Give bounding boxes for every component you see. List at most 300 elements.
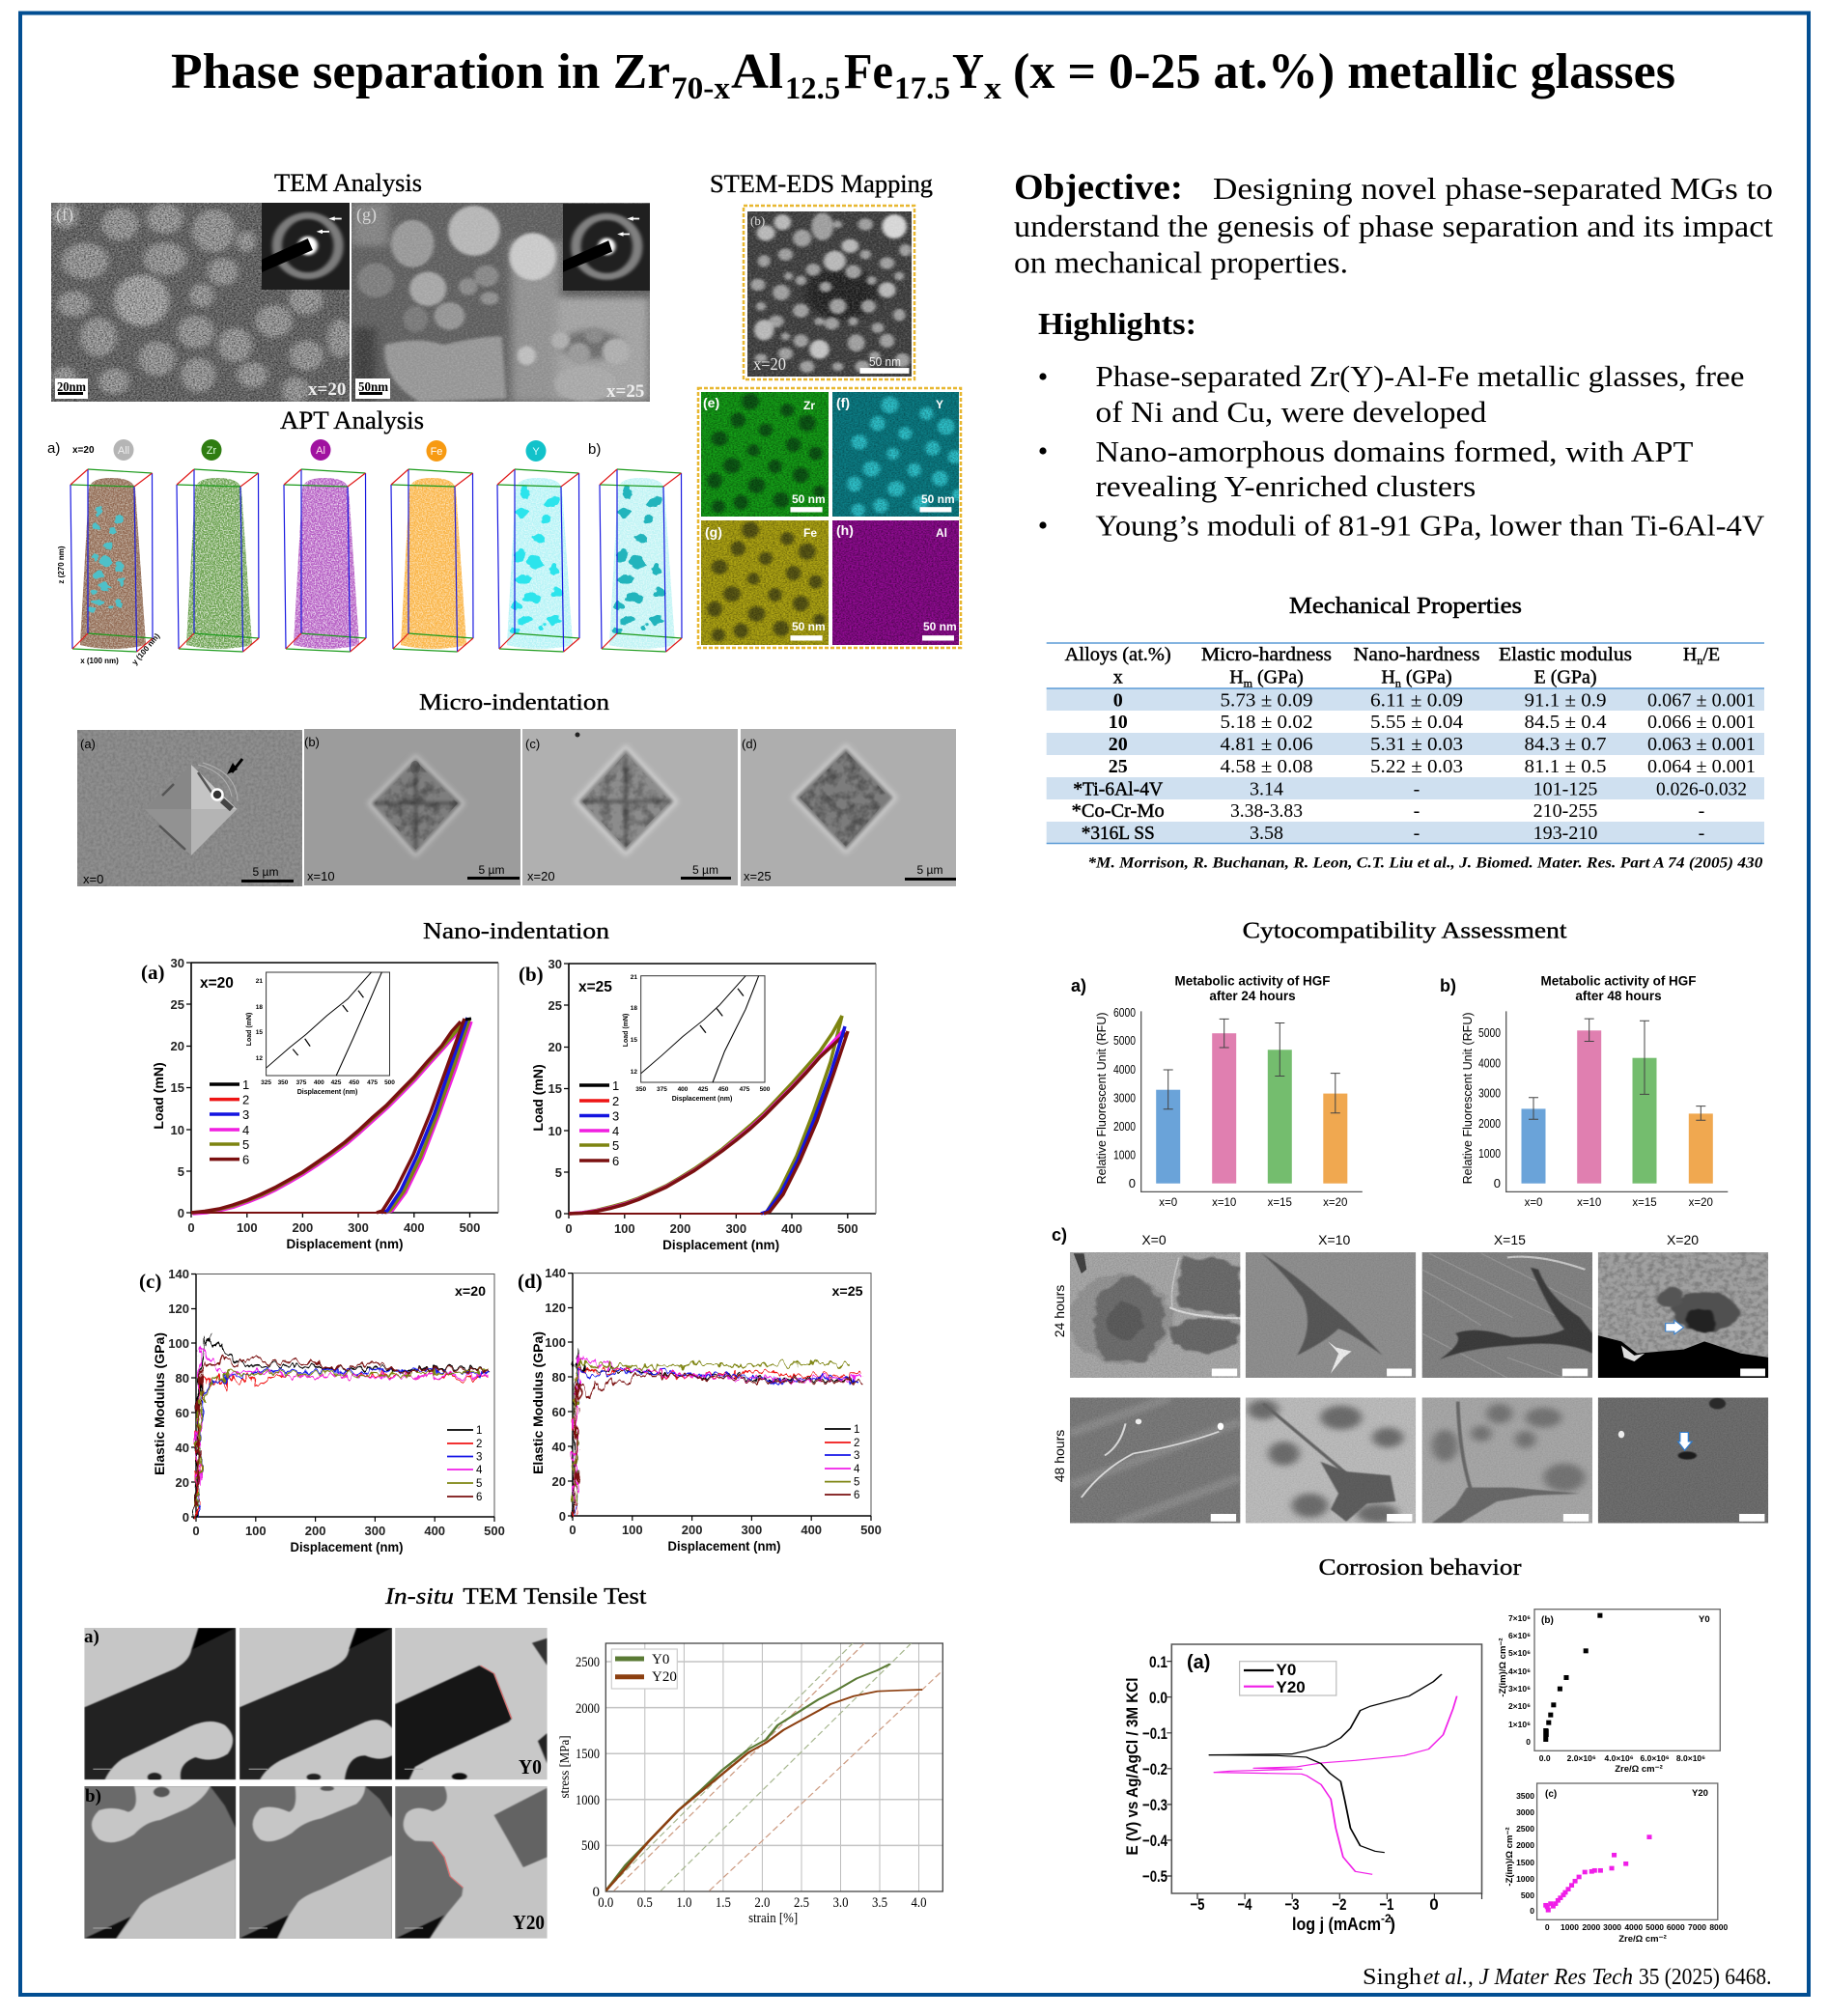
mechanical properties table: 84.3 ± 0.7 [1524, 734, 1607, 755]
mechanical properties table: 101-125 [1533, 778, 1597, 799]
mechanical properties table: H [1381, 667, 1395, 688]
STEM labels: 50 nm [869, 354, 901, 369]
mechanical properties table: 210-255 [1533, 800, 1597, 822]
inset b: 350 [635, 1086, 647, 1093]
chart d: elastic modulus x=25: Elastic Modulus (GPa) [530, 1331, 546, 1474]
chart c: elastic modulus x=20: 60 [176, 1406, 189, 1420]
bar chart b: 48 hours: x=10 [1577, 1197, 1601, 1209]
SEM grid labels: X=20 [1667, 1232, 1699, 1247]
mechanical properties table: 193-210 [1533, 823, 1597, 844]
Nyquist chart c: Y20: 2000 [1516, 1840, 1534, 1850]
inset b: 425 [698, 1086, 709, 1093]
STEM image x=20 [747, 211, 912, 377]
bar chart b: 48 hours: 4000 [1478, 1056, 1501, 1070]
Nyquist chart c: Y20: 1000 [1561, 1922, 1579, 1932]
APT reconstructions panel: b) [588, 441, 601, 458]
chart b: load-displacement x=25: 20 [548, 1040, 562, 1054]
SEM grid labels: X=15 [1494, 1232, 1526, 1247]
EDS labels: (h) [836, 522, 854, 538]
specimen: Al [284, 469, 366, 652]
Nyquist chart c: Y20: 2500 [1516, 1824, 1534, 1834]
title: 70-x [671, 71, 730, 106]
citation [1363, 1965, 1771, 1990]
chart a: load-displacement x=20: 0 [187, 1220, 195, 1235]
specimen: Zr [177, 469, 259, 652]
polarization chart a: ) [1390, 1915, 1395, 1934]
EDS labels: 50 nm [792, 620, 826, 633]
bar chart a: 24 hours: a) [1071, 976, 1086, 995]
chart c: elastic modulus x=20 [139, 1267, 505, 1554]
chart d: elastic modulus x=25: 140 [545, 1266, 566, 1280]
polarization chart a: log j (mAcm [1292, 1915, 1381, 1934]
bar chart b: 48 hours: b) [1440, 976, 1456, 995]
chart c: elastic modulus x=20: 300 [365, 1524, 385, 1538]
Nyquist chart c: Y20: 3000 [1516, 1807, 1534, 1817]
chart b: load-displacement x=25: 500 [837, 1221, 858, 1236]
APT element badges: Y [532, 446, 540, 458]
chart: stress-strain [558, 1643, 942, 1926]
SEM grid labels: 24 hours [1052, 1285, 1067, 1337]
heading: Nano-indentation: Nano-indentation [423, 919, 609, 944]
bar chart a: 24 hours: Relative Fluorescent Unit (RFU) [1094, 1012, 1109, 1184]
EDS labels: 50 nm [923, 620, 957, 633]
heading: STEM-EDS Mapping: STEM-EDS Mapping [710, 170, 933, 198]
mechanical properties table: m [1244, 677, 1253, 690]
title: Phase separation in Zr [171, 44, 670, 99]
chart d: elastic modulus x=25: 500 [860, 1523, 882, 1537]
Nyquist chart b: Y0: 5×10⁶ [1508, 1648, 1531, 1658]
TEM labels and scale bars: (f) [56, 205, 73, 225]
Nyquist chart b: Y0: 4.0×10⁶ [1605, 1753, 1634, 1763]
polarization chart a: 0.1 [1149, 1653, 1167, 1671]
legend c: 6 [476, 1492, 482, 1503]
legend c: 3 [476, 1452, 482, 1464]
title: (x = 0-25 at.%) metallic glasses [1013, 44, 1675, 99]
legend c [447, 1425, 483, 1503]
bar chart a: 24 hours: x=10 [1212, 1197, 1236, 1209]
mechanical properties table: Alloys (at.%) [1065, 644, 1171, 665]
bar chart b: 48 hours [1440, 973, 1728, 1209]
mechanical properties table: (GPa) [1401, 667, 1452, 688]
SEM 48h x=10 [1246, 1398, 1416, 1524]
chart c: elastic modulus x=20: 40 [176, 1441, 189, 1455]
polarization chart a: −2 [1333, 1895, 1346, 1914]
polarization chart a: -2 [1381, 1912, 1392, 1925]
micro-indent image x=20: x=20 [527, 869, 555, 883]
title: Y [952, 44, 984, 99]
inset a: 350 [278, 1079, 289, 1086]
Nyquist chart b: Y0 [1498, 1610, 1720, 1775]
inset b: Load (mN) [623, 1014, 630, 1047]
heading: Micro-indentation: Micro-indentation [419, 690, 609, 715]
mechanical properties table: /E [1702, 644, 1720, 665]
bar chart a: 24 hours: 2000 [1113, 1119, 1136, 1134]
chart a: load-displacement x=20: Load (mN) [151, 1062, 166, 1130]
legend c: 5 [476, 1478, 482, 1490]
APT reconstructions panel: x (100 nm) [80, 657, 119, 665]
citation: Singh [1363, 1965, 1421, 1990]
bar chart b: 48 hours: 0 [1494, 1176, 1501, 1190]
APT element badges [114, 439, 547, 462]
polarization chart a: −0.5 [1142, 1867, 1167, 1886]
polarization chart a: −1 [1379, 1895, 1394, 1914]
legend: Y20 [652, 1669, 677, 1685]
heading: In-situ TEM Tensile Test: TEM Tensile Test [463, 1584, 647, 1610]
inset b: 400 [678, 1086, 689, 1093]
mechanical properties table: 3.14 [1250, 778, 1283, 799]
mechanical properties table: 0.064 ± 0.001 [1647, 756, 1756, 777]
chart: stress-strain: 0 [593, 1885, 600, 1900]
legend [1240, 1661, 1336, 1696]
chart c: elastic modulus x=20: 20 [176, 1475, 189, 1490]
table footnote: *M. Morrison, R. Buchanan, R. Leon, C.T. Liu et al., J. Biomed. Mater. Res. Part A 74 (2005) 430 [1087, 855, 1762, 871]
mechanical properties table: 91.1 ± 0.9 [1524, 690, 1607, 712]
chart d: elastic modulus x=25: 40 [552, 1440, 566, 1454]
Nyquist chart b: Y0: Y0 [1699, 1614, 1710, 1625]
title [171, 44, 1675, 106]
Nyquist chart c: Y20: -Z(im)/Ω cm⁻² [1505, 1827, 1515, 1887]
chart: stress-strain: 1.0 [676, 1895, 691, 1911]
title: Al [731, 44, 783, 99]
mechanical properties table: 3.38-3.83 [1230, 800, 1303, 822]
micro-indent image x=25 [741, 729, 956, 886]
SEM grid labels: X=0 [1141, 1232, 1167, 1247]
chart d: elastic modulus x=25: 0 [569, 1523, 577, 1537]
chart c: elastic modulus x=20: 200 [305, 1524, 325, 1538]
chart: stress-strain: 500 [581, 1838, 600, 1854]
legend b: 5 [612, 1138, 619, 1153]
mechanical properties table: - [1414, 823, 1420, 844]
mechanical properties table: Micro-hardness [1201, 644, 1332, 665]
bar chart b: 48 hours: 3000 [1478, 1085, 1501, 1101]
chart: stress-strain: 1500 [576, 1747, 600, 1762]
chart a: load-displacement x=20: 0 [178, 1206, 184, 1220]
chart a: load-displacement x=20: 15 [171, 1080, 184, 1095]
Nyquist chart b: Y0: Zre/Ω cm⁻² [1615, 1764, 1663, 1775]
inset a: 21 [256, 978, 263, 985]
Nyquist chart c: Y20: (c) [1545, 1789, 1557, 1800]
legend a: 4 [242, 1123, 249, 1137]
legend d: 6 [854, 1490, 859, 1501]
chart a: load-displacement x=20 [141, 956, 498, 1251]
EDS map Y [832, 392, 959, 517]
chart c: elastic modulus x=20: 120 [168, 1302, 189, 1316]
bar chart a: 24 hours: Metabolic activity of HGF [1174, 973, 1331, 989]
chart b: load-displacement x=25: 0 [555, 1207, 562, 1221]
chart a: load-displacement x=20: 100 [237, 1220, 258, 1235]
inset b: 450 [718, 1086, 729, 1093]
APT element badges: All [118, 445, 129, 457]
bar chart b: 48 hours: x=0 [1525, 1197, 1542, 1209]
objective text: on mechanical properties. [1014, 245, 1348, 280]
legend: Y0 [652, 1652, 669, 1667]
tensile image labels: a) [84, 1627, 99, 1647]
heading: Cytocompatibility Assessment: Cytocompatibility Assessment [1243, 919, 1567, 944]
chart a: load-displacement x=20: 25 [171, 997, 184, 1012]
SEM grid labels [1052, 1225, 1699, 1482]
Nyquist chart c: Y20: 0 [1530, 1906, 1534, 1916]
heading: In-situ TEM Tensile Test [384, 1584, 647, 1610]
polarization chart a: −4 [1238, 1895, 1252, 1914]
polarization chart a: −5 [1190, 1895, 1205, 1914]
chart d: elastic modulus x=25: 200 [682, 1523, 702, 1537]
Nyquist chart b: Y0: 8.0×10⁶ [1676, 1753, 1705, 1763]
mechanical properties table: H [1229, 667, 1244, 688]
micro-indent image x=20: (c) [525, 737, 540, 751]
mechanical properties table: Nano-hardness [1354, 644, 1480, 665]
highlights list: revealing Y-enriched clusters [1095, 469, 1476, 503]
chart a: load-displacement x=20: Displacement (nm) [286, 1236, 404, 1251]
EDS labels: 50 nm [792, 492, 826, 506]
mechanical properties table: 5.55 ± 0.04 [1370, 712, 1463, 733]
chart d: elastic modulus x=25: 120 [545, 1301, 566, 1315]
bar chart b: 48 hours: 1000 [1478, 1146, 1501, 1161]
bar chart a: 24 hours [1071, 973, 1363, 1209]
chart d: elastic modulus x=25: 20 [552, 1474, 566, 1489]
inset a: 375 [296, 1079, 307, 1086]
chart a: load-displacement x=20: (a) [141, 961, 164, 984]
inset a: 400 [314, 1079, 324, 1086]
bar chart b: 48 hours: Relative Fluorescent Unit (RFU) [1460, 1012, 1475, 1184]
chart a: load-displacement x=20: 200 [293, 1220, 313, 1235]
mechanical properties table: (GPa) [1252, 667, 1304, 688]
legend c: 2 [476, 1439, 482, 1450]
bar chart a: 24 hours: 3000 [1113, 1091, 1136, 1105]
chart: stress-strain: 3.0 [832, 1895, 848, 1911]
EDS labels: Fe [803, 526, 817, 540]
chart c: elastic modulus x=20: (c) [139, 1270, 161, 1293]
Nyquist chart b: Y0: 3×10⁶ [1508, 1684, 1531, 1694]
mechanical properties table: 0 [1113, 690, 1123, 712]
bar chart a: 24 hours: after 24 hours [1209, 989, 1296, 1003]
Nyquist chart c: Y20: Y20 [1692, 1788, 1708, 1799]
chart b: load-displacement x=25: 25 [548, 998, 562, 1013]
chart b: load-displacement x=25: 400 [781, 1221, 802, 1236]
title: Fe [844, 44, 893, 99]
chart d: elastic modulus x=25: Displacement (nm) [668, 1538, 780, 1554]
chart b: load-displacement x=25: x=25 [578, 979, 612, 995]
Nyquist chart c: Y20: 8000 [1709, 1922, 1729, 1932]
Nyquist chart c: Y20: 4000 [1624, 1922, 1644, 1932]
mechanical properties table: 3.58 [1250, 823, 1283, 844]
chart d: elastic modulus x=25: 300 [742, 1523, 762, 1537]
chart c: elastic modulus x=20: 140 [168, 1267, 189, 1281]
SEM grid labels: X=10 [1318, 1232, 1350, 1247]
EDS labels: Al [936, 526, 947, 540]
SEM grid labels: c) [1052, 1225, 1067, 1245]
APT reconstructions panel: a) [47, 440, 60, 457]
chart c: elastic modulus x=20: 100 [168, 1336, 189, 1351]
legend c: 4 [476, 1465, 483, 1476]
legend d: 2 [854, 1438, 859, 1449]
micro-indent image x=0: 5 µm [253, 865, 278, 879]
chart b: load-displacement x=25: 0 [565, 1221, 573, 1236]
mechanical properties table: 0.026-0.032 [1656, 778, 1747, 799]
EDS labels: (f) [836, 395, 850, 410]
inset a: 450 [349, 1079, 360, 1086]
Nyquist chart c: Y20: 3000 [1603, 1922, 1621, 1932]
bar chart a: 24 hours: 1000 [1113, 1147, 1136, 1162]
objective text: understand the genesis of phase separation and its impact [1014, 209, 1773, 243]
chart c: elastic modulus x=20: 500 [484, 1524, 505, 1538]
inset b: 15 [631, 1037, 637, 1044]
Nyquist chart c: Y20: 1500 [1516, 1858, 1534, 1867]
bar chart a: 24 hours: x=0 [1159, 1197, 1177, 1209]
mechanical properties table: 6.11 ± 0.09 [1370, 690, 1463, 712]
chart: stress-strain: 2.0 [754, 1895, 770, 1911]
citation: 35 (2025) 6468. [1639, 1965, 1771, 1990]
heading: APT Analysis: APT Analysis [280, 406, 424, 434]
polarization chart a [1123, 1644, 1481, 1934]
citation: et al., J Mater Res Tech [1423, 1965, 1633, 1990]
SEM 48h x=20 [1597, 1398, 1769, 1524]
chart: stress-strain: 1000 [576, 1793, 600, 1808]
bar chart b: 48 hours: 5000 [1478, 1025, 1501, 1040]
chart c: elastic modulus x=20: 400 [424, 1524, 445, 1538]
legend a [210, 1078, 249, 1166]
inset a: 12 [256, 1055, 263, 1062]
mechanical properties table: 20 [1109, 734, 1128, 755]
highlights list: Nano-amorphous domains formed, with APT [1095, 434, 1693, 468]
mechanical properties table: x [1113, 667, 1123, 688]
inset a [246, 972, 395, 1096]
EDS labels: (g) [705, 524, 722, 540]
polarization chart a: E (V) vs Ag/AgCl / 3M KCl [1123, 1678, 1141, 1856]
chart b: load-displacement x=25: 300 [725, 1221, 746, 1236]
legend d [825, 1424, 860, 1501]
mechanical properties table: 4.81 ± 0.06 [1221, 734, 1313, 755]
legend: Y0 [1277, 1661, 1296, 1679]
bar chart a: 24 hours: 5000 [1113, 1033, 1136, 1048]
mechanical properties table: 0.063 ± 0.001 [1647, 734, 1756, 755]
TEM labels and scale bars: x=20 [308, 379, 346, 400]
inset a: 425 [331, 1079, 342, 1086]
legend d: 4 [854, 1464, 860, 1475]
inset b: 21 [631, 974, 637, 981]
chart a: load-displacement x=20: 300 [348, 1220, 369, 1235]
micro-indent image x=20 [522, 729, 738, 885]
chart c: elastic modulus x=20: 0 [183, 1510, 189, 1525]
Nyquist chart c: Y20: Zre/Ω cm⁻² [1618, 1934, 1667, 1945]
chart: stress-strain: 2500 [576, 1655, 600, 1670]
micro-indent image x=25: 5 µm [917, 863, 942, 877]
APT reconstructions panel: z (270 nm) [57, 546, 66, 584]
mechanical properties table: Elastic modulus [1499, 644, 1632, 665]
Nyquist chart b: Y0: 0.0 [1539, 1753, 1551, 1763]
micro-indent image x=25: x=25 [744, 869, 772, 883]
chart: stress-strain: 0.0 [598, 1895, 613, 1911]
TEM labels and scale bars: x=25 [606, 381, 644, 402]
objective text [1014, 168, 1773, 280]
mechanical properties table: 0.067 ± 0.001 [1647, 690, 1756, 712]
polarization chart a: (a) [1187, 1652, 1210, 1673]
SEM 24h x=20 [1597, 1252, 1769, 1378]
Nyquist chart b: Y0: (b) [1541, 1615, 1554, 1626]
legend c: 1 [476, 1425, 482, 1437]
tensile images row Y0 [84, 1628, 548, 1780]
polarization chart a: −0.1 [1142, 1724, 1167, 1743]
inset a: 18 [256, 1004, 263, 1011]
mechanical properties table: 5.22 ± 0.03 [1370, 756, 1463, 777]
Nyquist chart b: Y0: 7×10⁶ [1508, 1613, 1531, 1623]
micro-indent image x=10: 5 µm [479, 863, 504, 877]
chart a: load-displacement x=20: 20 [171, 1039, 184, 1053]
Nyquist chart c: Y20: 1000 [1516, 1874, 1534, 1884]
chart d: elastic modulus x=25: 100 [545, 1335, 566, 1350]
inset b: 475 [740, 1086, 750, 1093]
chart: stress-strain: stress [MPa] [558, 1736, 573, 1798]
SEM 24h x=0 [1070, 1252, 1240, 1378]
chart c: elastic modulus x=20: Displacement (nm) [290, 1539, 404, 1554]
legend a: 6 [242, 1153, 249, 1166]
polarization chart a: 0.0 [1149, 1689, 1167, 1707]
mechanical properties table: - [1699, 800, 1704, 822]
micro-indent image x=0 [77, 730, 302, 886]
APT element badges: Fe [431, 446, 442, 458]
chart d: elastic modulus x=25: 100 [622, 1523, 643, 1537]
title: 17.5 [894, 71, 950, 106]
polarization chart a: −0.2 [1142, 1760, 1167, 1778]
legend a: 3 [242, 1107, 249, 1122]
chart b: load-displacement x=25: 30 [548, 957, 562, 971]
TEM labels and scale bars [55, 205, 644, 402]
SEM 24h x=10 [1246, 1252, 1416, 1378]
tensile images row Y20 [84, 1786, 548, 1939]
EDS labels: 50 nm [921, 492, 955, 506]
micro-indent image x=10: x=10 [307, 869, 335, 883]
mechanical properties table: *Co-Cr-Mo [1072, 800, 1165, 822]
inset a: Load (mN) [246, 1013, 253, 1046]
chart b: load-displacement x=25: 200 [670, 1221, 690, 1236]
polarization chart a: −3 [1284, 1895, 1300, 1914]
legend: Y20 [1277, 1678, 1306, 1696]
polarization chart a: −0.4 [1142, 1832, 1167, 1850]
bar chart b: 48 hours: 2000 [1478, 1116, 1501, 1131]
Nyquist chart b: Y0: 6.0×10⁶ [1641, 1753, 1670, 1763]
mechanical properties table: 84.5 ± 0.4 [1524, 712, 1607, 733]
legend d: 5 [854, 1477, 859, 1489]
chart b: load-displacement x=25: (b) [519, 963, 544, 986]
chart c: elastic modulus x=20: 100 [245, 1524, 267, 1538]
chart: stress-strain: 1.5 [716, 1895, 731, 1911]
mechanical properties table: 25 [1109, 756, 1128, 777]
Nyquist chart c: Y20: 7000 [1688, 1922, 1706, 1932]
bar chart b: 48 hours: x=15 [1632, 1197, 1657, 1209]
mechanical properties table: 5.31 ± 0.03 [1370, 734, 1463, 755]
mechanical properties table: n [1395, 677, 1401, 690]
EDS map Al [832, 520, 959, 645]
STEM labels: (b) [750, 213, 765, 228]
tensile image labels: b) [85, 1786, 101, 1806]
chart d: elastic modulus x=25 [518, 1266, 882, 1554]
chart a: load-displacement x=20: 400 [404, 1220, 425, 1235]
EDS maps frame [698, 388, 961, 648]
APT element badges: Zr [207, 445, 217, 457]
specimen: Y [497, 469, 579, 652]
chart: stress-strain: 2000 [576, 1701, 600, 1717]
mechanical properties table: - [1414, 778, 1420, 799]
EDS map Zr [701, 392, 829, 517]
bar chart b: 48 hours: after 48 hours [1575, 989, 1662, 1003]
Nyquist chart b: Y0: 1×10⁶ [1508, 1720, 1531, 1729]
inset b: 500 [760, 1086, 771, 1093]
chart b: load-displacement x=25 [519, 957, 876, 1252]
chart: stress-strain: 3.5 [872, 1895, 887, 1911]
micro-indent image x=0: x=0 [83, 872, 103, 886]
EDS labels: Zr [803, 399, 815, 412]
SEM 48h x=0 [1070, 1398, 1240, 1524]
legend a: 1 [242, 1078, 249, 1092]
